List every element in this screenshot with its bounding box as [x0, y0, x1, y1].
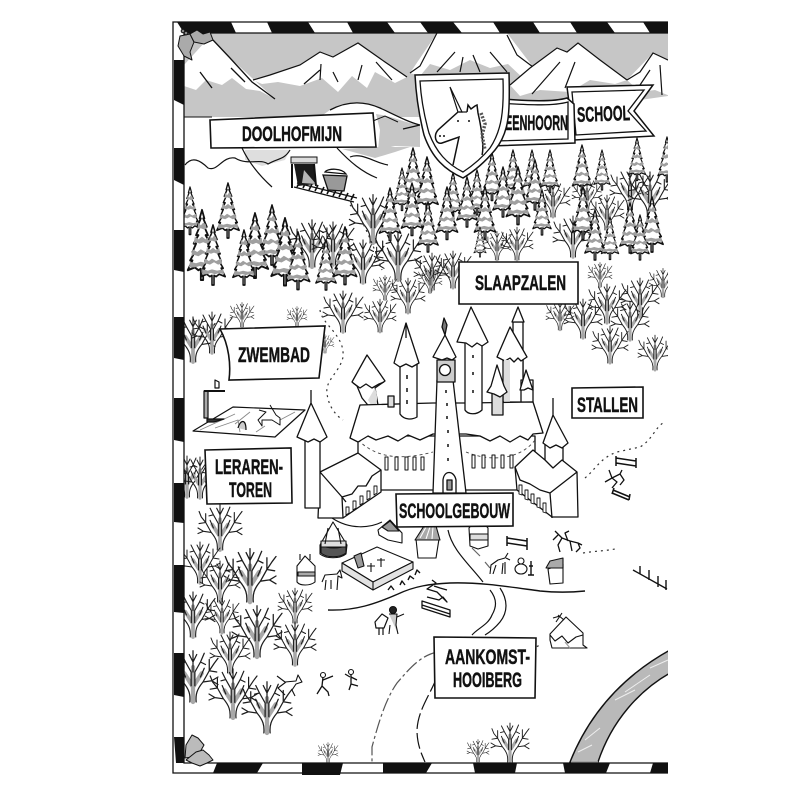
- stall: pink: [378, 520, 402, 543]
- label: aankomst-hooiberg: [434, 637, 536, 698]
- left stripes: [174, 60, 184, 763]
- small cone tower: [487, 365, 507, 415]
- stable hurdle one: [616, 456, 636, 468]
- swimmer: [238, 422, 246, 430]
- banner: school: SCHOOL: [577, 102, 631, 127]
- circus tent: [320, 522, 347, 558]
- stable hurdle two: [612, 488, 630, 500]
- label: lerarentoren: LERAREN-: [215, 456, 283, 479]
- holly bottom left: [185, 735, 213, 766]
- thin back turret: [512, 307, 524, 377]
- label: slaapzalen: SLAAPZALEN: [475, 272, 566, 295]
- right wing tower: [543, 398, 568, 470]
- stall: right: [469, 517, 488, 549]
- label: schoolgebouw: [396, 493, 513, 527]
- unicorn head: [435, 87, 485, 165]
- hay stack: [550, 613, 587, 648]
- bare trees: lower left woods: [168, 505, 529, 763]
- frame: [173, 22, 668, 775]
- right back tower: [497, 327, 527, 402]
- knight on unicorn: [553, 531, 582, 552]
- label: lerarentoren: TOREN: [229, 479, 272, 502]
- left wing tower: [297, 390, 327, 508]
- spectators: [388, 570, 420, 590]
- central clock tower: [433, 318, 466, 493]
- bare trees behind forest: [289, 169, 672, 283]
- conifer forest: left row: [180, 183, 357, 290]
- label: stallen: [572, 387, 643, 418]
- shield with unicorn: [415, 73, 509, 178]
- pool basin: [193, 407, 305, 437]
- label: schoolgebouw: SCHOOLGEBOUW: [399, 500, 510, 523]
- castle: [297, 307, 578, 518]
- far-left bulb tower: [352, 355, 385, 410]
- mountain: left peak: [184, 40, 275, 99]
- mountain: central peak: [410, 33, 533, 80]
- fence: [507, 536, 527, 550]
- mine cart: [323, 169, 347, 191]
- holly top left: [178, 29, 213, 60]
- swimming pool: [193, 380, 305, 437]
- main roof: [350, 402, 543, 442]
- fair grounds: [277, 456, 667, 696]
- dotted trails: [320, 205, 663, 650]
- label: aankomst-hooiberg: HOOIBERG: [453, 669, 522, 692]
- chimney: [388, 396, 394, 407]
- horse with shadow: [277, 675, 302, 696]
- banner: eenhoorn: [490, 98, 575, 146]
- tall right tower: [457, 307, 488, 414]
- two knights: [375, 606, 404, 635]
- jump hurdle: [422, 601, 450, 617]
- snowball child one: [317, 672, 333, 696]
- right wing: [515, 450, 578, 518]
- main wall: [358, 436, 535, 490]
- sky and mountains: [184, 33, 670, 290]
- conifer forest: upper cluster: [379, 137, 676, 260]
- banner: doolhofmijn: [210, 113, 376, 148]
- label: lerarentoren: [205, 448, 292, 504]
- banner: school: [567, 85, 654, 140]
- label: zwembad: [220, 326, 325, 380]
- mine hill: [184, 103, 420, 290]
- label: aankomst-hooiberg: AANKOMST-: [445, 646, 530, 669]
- banner: doolhofmijn: DOOLHOFMIJN: [242, 123, 342, 146]
- stall: left: [297, 554, 315, 585]
- jumping horse: [427, 580, 447, 602]
- banner: eenhoorn: EENHOORN: [505, 112, 568, 135]
- left tower: [394, 323, 419, 419]
- label: slaapzalen: [459, 262, 578, 304]
- snowman and child: [515, 558, 534, 575]
- unicorn in pool: [258, 405, 280, 426]
- stall: far right: [546, 558, 563, 584]
- bottom stripes: [213, 763, 668, 775]
- label: zwembad: ZWEMBAD: [238, 344, 310, 367]
- horse on left: [322, 570, 342, 590]
- stable rider: [605, 470, 624, 488]
- diving board: [207, 419, 224, 422]
- left wing: [318, 453, 381, 518]
- top stripes: [177, 22, 668, 33]
- mountain: right peak: [510, 43, 627, 96]
- bunting: [332, 518, 382, 527]
- unicorn: [490, 553, 510, 574]
- mine entrance and cart: [291, 157, 357, 202]
- mountain: far right peak: [627, 53, 670, 96]
- small right turret: [520, 370, 533, 402]
- roads and paths: [328, 530, 585, 763]
- label: stallen: STALLEN: [577, 394, 638, 417]
- diving tower: [204, 380, 225, 418]
- snowball child two: [345, 670, 358, 690]
- stall: striped: [415, 526, 440, 558]
- far right fence: [633, 566, 667, 590]
- mine door: [291, 157, 317, 188]
- frame outlines: [173, 22, 668, 773]
- bare trees: centre and right groups: [167, 227, 677, 498]
- arena: [342, 547, 413, 590]
- mountain: second ridge: [253, 43, 407, 92]
- mine tracks: [294, 181, 357, 202]
- rainbow: [570, 650, 670, 762]
